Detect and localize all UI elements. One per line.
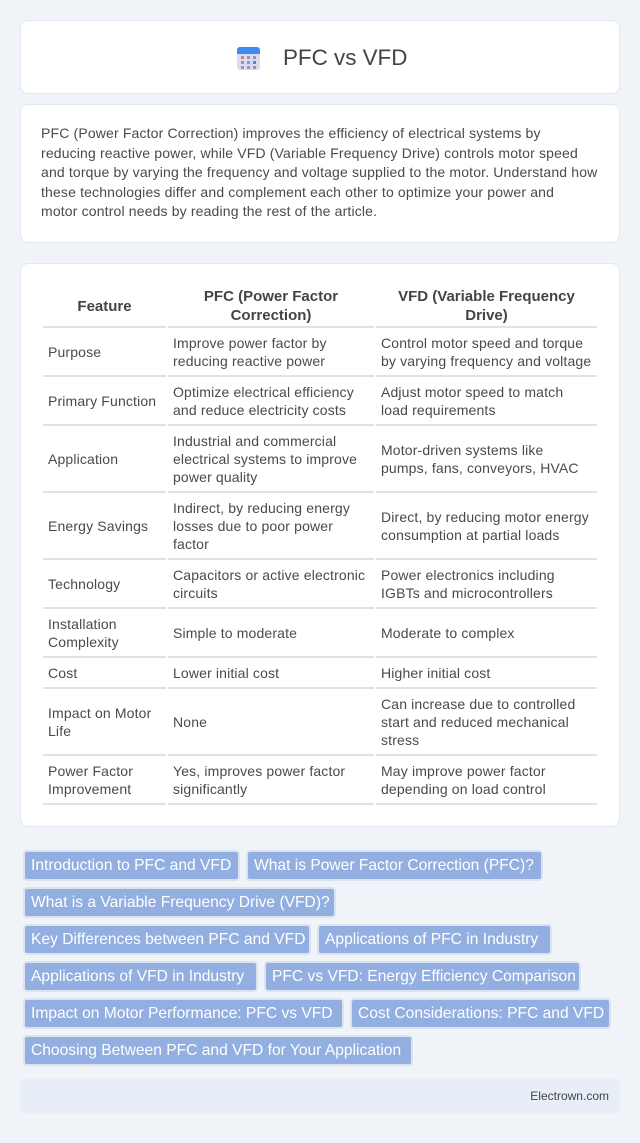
- tag: [317, 924, 552, 955]
- intro text: motor control needs by reading the rest of the article.: [41, 203, 377, 219]
- row: cost: Lower initial cost: [173, 665, 279, 681]
- intro text: these technologies differ and complement each other to optimize your power and: [41, 184, 554, 200]
- row: application: Industrial and commercial: [173, 433, 336, 449]
- tag: Applications of VFD in Industry: [31, 968, 244, 985]
- row: primary function: load requirements: [381, 402, 496, 418]
- row: cost: Cost: [48, 665, 77, 681]
- row: purpose: by varying frequency and voltage: [381, 353, 591, 369]
- footer: [20, 1079, 620, 1113]
- tag: [23, 924, 311, 955]
- row: purpose: Improve power factor by: [173, 335, 327, 351]
- row: installation complexity: Simple to moderate: [173, 625, 297, 641]
- comparison table panel: [20, 263, 620, 827]
- row: purpose: reducing reactive power: [173, 353, 325, 369]
- row: purpose: Control motor speed and torque: [381, 335, 583, 351]
- row: primary function: and reduce electricity costs: [173, 402, 346, 418]
- tag: [23, 961, 258, 992]
- row: installation complexity: Complexity: [48, 634, 119, 650]
- tag: [23, 998, 344, 1029]
- tag: Impact on Motor Performance: PFC vs VFD: [31, 1005, 333, 1022]
- row: energy savings: [48, 500, 589, 552]
- topic tags: [23, 850, 611, 1066]
- row: technology: Capacitors or active electronic: [173, 567, 365, 583]
- row: power factor improvement: [48, 763, 546, 797]
- row: application: electrical systems to improve: [173, 451, 357, 467]
- footer credit: Electrown.com: [530, 1089, 609, 1103]
- table header: VFD (Variable Frequency: [398, 288, 575, 305]
- row: impact on motor life: Impact on Motor: [48, 705, 151, 721]
- tag: Choosing Between PFC and VFD for Your Application: [31, 1042, 401, 1059]
- tag: What is a Variable Frequency Drive (VFD)?: [31, 894, 330, 911]
- row: power factor improvement: Improvement: [48, 781, 131, 797]
- table header: PFC (Power Factor: [204, 288, 338, 305]
- row: primary function: Primary Function: [48, 393, 156, 409]
- row: cost: [48, 665, 490, 681]
- row: energy savings: Indirect, by reducing energy: [173, 500, 350, 516]
- tag: [23, 850, 240, 881]
- row: cost: Higher initial cost: [381, 665, 490, 681]
- row: energy savings: losses due to poor power: [173, 518, 333, 534]
- row: technology: [48, 567, 555, 601]
- row: energy savings: Energy Savings: [48, 518, 148, 534]
- tag: [350, 998, 611, 1029]
- row: application: Application: [48, 451, 118, 467]
- row: primary function: Optimize electrical efficiency: [173, 384, 354, 400]
- tag: [246, 850, 543, 881]
- row: impact on motor life: start and reduced mechanical: [381, 714, 569, 730]
- row: primary function: Adjust motor speed to match: [381, 384, 563, 400]
- row: installation complexity: Moderate to complex: [381, 625, 515, 641]
- row: application: power quality: [173, 469, 257, 485]
- intro text: PFC (Power Factor Correction) improves the efficiency of electrical systems by: [41, 125, 541, 141]
- table header: Correction): [231, 307, 311, 324]
- row: purpose: Purpose: [48, 344, 101, 360]
- row: power factor improvement: significantly: [173, 781, 247, 797]
- row: impact on motor life: Can increase due to controlled: [381, 696, 575, 712]
- row: technology: IGBTs and microcontrollers: [381, 585, 553, 601]
- row: power factor improvement: Yes, improves power factor: [173, 763, 345, 779]
- intro panel: [20, 104, 620, 243]
- row: primary function: [48, 384, 563, 418]
- tag: PFC vs VFD: Energy Efficiency Comparison: [272, 968, 576, 985]
- tag: Introduction to PFC and VFD: [31, 857, 231, 874]
- row: purpose: [48, 335, 591, 369]
- row: impact on motor life: Life: [48, 723, 71, 739]
- tag: Cost Considerations: PFC and VFD: [358, 1005, 604, 1022]
- intro text: reducing reactive power, while VFD (Variable Frequency Drive) controls motor speed: [41, 144, 578, 160]
- row: installation complexity: Installation: [48, 616, 117, 632]
- row: power factor improvement: Power Factor: [48, 763, 133, 779]
- title text: PFC vs VFD: [283, 45, 407, 70]
- row: application: [48, 433, 579, 485]
- tag: [23, 1035, 413, 1066]
- tag: Applications of PFC in Industry: [325, 931, 538, 948]
- table header: Feature: [77, 298, 132, 315]
- row: application: pumps, fans, conveyors, HVAC: [381, 460, 579, 476]
- row: technology: circuits: [173, 585, 218, 601]
- row: technology: Power electronics including: [381, 567, 555, 583]
- row: energy savings: factor: [173, 536, 209, 552]
- intro text: and torque by varying the frequency and voltage supplied to the motor. Understand how: [41, 164, 597, 180]
- row: impact on motor life: None: [173, 714, 207, 730]
- row: application: Motor-driven systems like: [381, 442, 543, 458]
- row: impact on motor life: [48, 696, 575, 748]
- tag: [23, 887, 336, 918]
- tag: [264, 961, 581, 992]
- table header: Drive): [465, 307, 508, 324]
- comparison table: [43, 288, 597, 805]
- row: power factor improvement: May improve power factor: [381, 763, 546, 779]
- icon: calendar: [237, 47, 260, 70]
- row: power factor improvement: depending on load control: [381, 781, 546, 797]
- row: technology: Technology: [48, 576, 120, 592]
- table header: [77, 288, 575, 324]
- row: impact on motor life: stress: [381, 732, 419, 748]
- row: energy savings: consumption at partial loads: [381, 527, 560, 543]
- tag: Key Differences between PFC and VFD: [31, 931, 305, 948]
- row: energy savings: Direct, by reducing motor energy: [381, 509, 589, 525]
- tag: What is Power Factor Correction (PFC)?: [254, 857, 534, 874]
- intro text: [41, 125, 598, 219]
- row: installation complexity: [48, 616, 515, 650]
- title card: [20, 20, 620, 94]
